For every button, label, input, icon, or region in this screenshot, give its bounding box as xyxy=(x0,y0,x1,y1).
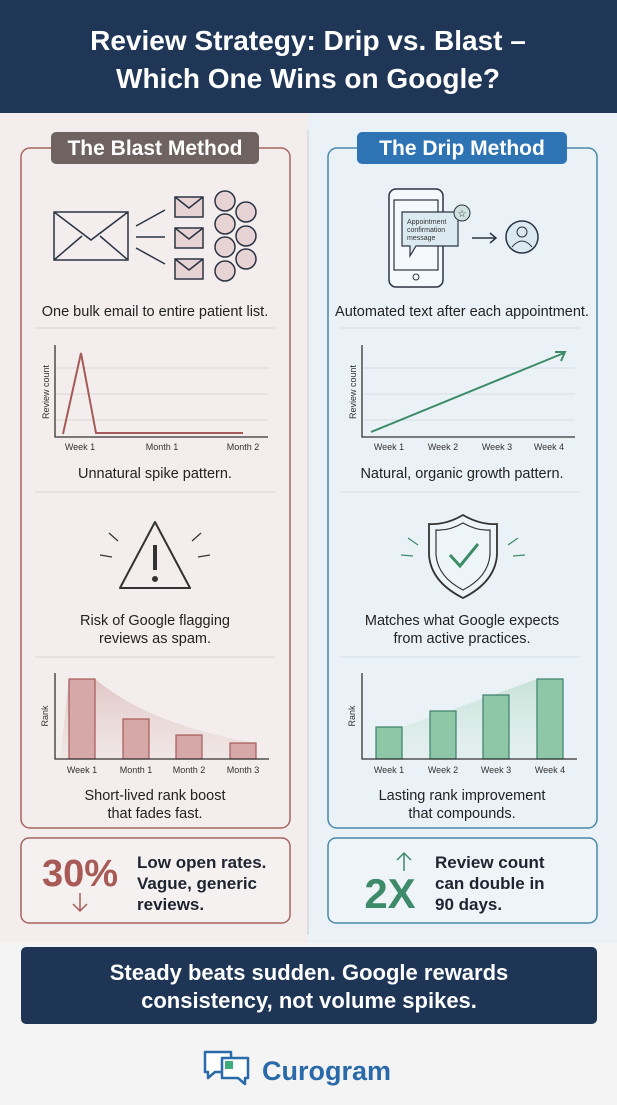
icon: phone message: Appointment xyxy=(407,219,446,226)
caption: from active practices. xyxy=(394,631,530,647)
chart: growing bars: Week 2 xyxy=(428,765,458,775)
banner: conclusion xyxy=(21,947,597,1024)
chart: spike xyxy=(41,345,268,452)
stat box: drip: can double in xyxy=(435,874,545,893)
chart: steady growth: Week 2 xyxy=(428,442,458,452)
caption xyxy=(365,613,559,647)
caption xyxy=(379,788,545,822)
stat box: blast: reviews. xyxy=(137,895,204,914)
chart: steady growth: Week 1 xyxy=(374,442,404,452)
stat box: blast: Low open rates. xyxy=(137,853,266,872)
chart: growing bars: Week 1 xyxy=(374,765,404,775)
chart: fading bars: Rank xyxy=(40,705,50,727)
chart: fading bars: Month 2 xyxy=(173,765,205,775)
stat box: drip: 90 days. xyxy=(435,895,502,914)
chart: spike: Week 1 xyxy=(65,442,95,452)
panel: blast method xyxy=(21,132,290,828)
chart: spike: Month 2 xyxy=(227,442,259,452)
heading: blast xyxy=(51,132,259,164)
caption: that compounds. xyxy=(408,806,516,822)
heading: blast: The Blast Method xyxy=(67,137,243,160)
caption: Natural, organic growth pattern. xyxy=(360,466,564,482)
caption: Lasting rank improvement xyxy=(379,788,545,804)
stat box: blast xyxy=(21,838,290,923)
stat box: drip xyxy=(328,838,597,923)
chart: fading bars xyxy=(40,673,269,775)
chart: steady growth: Week 3 xyxy=(482,442,512,452)
caption xyxy=(80,613,230,647)
chart: steady growth: Week 4 xyxy=(534,442,564,452)
caption: Matches what Google expects xyxy=(365,613,559,629)
icon: phone message xyxy=(389,189,538,287)
chart: growing bars: Rank xyxy=(347,705,357,727)
banner: conclusion: consistency, not volume spikes. xyxy=(141,988,477,1013)
icon: shield check xyxy=(401,515,525,598)
header: Which One Wins on Google? xyxy=(116,63,500,94)
chart: growing bars: Week 4 xyxy=(535,765,565,775)
icon: bulk email xyxy=(54,191,256,281)
chart: growing bars: Week 3 xyxy=(481,765,511,775)
heading: drip xyxy=(357,132,567,164)
icon: phone message: ☆ xyxy=(458,209,467,220)
chart: steady growth: Review count xyxy=(348,364,358,419)
caption: Unnatural spike pattern. xyxy=(78,466,232,482)
stat box: blast: Vague, generic xyxy=(137,874,257,893)
logo: Curogram xyxy=(205,1052,391,1086)
header xyxy=(0,0,617,113)
icon: phone message: confirmation xyxy=(407,227,445,234)
caption: Risk of Google flagging xyxy=(80,613,230,629)
stat box: drip: 2X xyxy=(364,870,416,917)
caption: One bulk email to entire patient list. xyxy=(42,304,268,320)
chart: steady growth xyxy=(348,345,575,452)
heading: drip: The Drip Method xyxy=(379,137,545,160)
icon: phone message: message xyxy=(407,235,436,242)
banner: conclusion: Steady beats sudden. Google rewards xyxy=(110,960,508,985)
logo: Curogram: Curogram xyxy=(262,1056,391,1086)
icon: warning xyxy=(100,522,210,588)
stat box: drip: Review count xyxy=(435,853,545,872)
caption: Short-lived rank boost xyxy=(84,788,226,804)
caption: that fades fast. xyxy=(107,806,203,822)
chart: growing bars xyxy=(347,673,577,775)
stat box: blast: 30% xyxy=(42,853,118,895)
panel: drip method xyxy=(328,132,597,828)
chart: fading bars: Month 1 xyxy=(120,765,152,775)
chart: spike: Review count xyxy=(41,364,51,419)
chart: fading bars: Month 3 xyxy=(227,765,259,775)
chart: fading bars: Week 1 xyxy=(67,765,97,775)
caption xyxy=(84,788,226,822)
header: Review Strategy: Drip vs. Blast – xyxy=(90,25,526,56)
caption: Automated text after each appointment. xyxy=(335,304,589,320)
chart: spike: Month 1 xyxy=(146,442,178,452)
caption: reviews as spam. xyxy=(99,631,211,647)
